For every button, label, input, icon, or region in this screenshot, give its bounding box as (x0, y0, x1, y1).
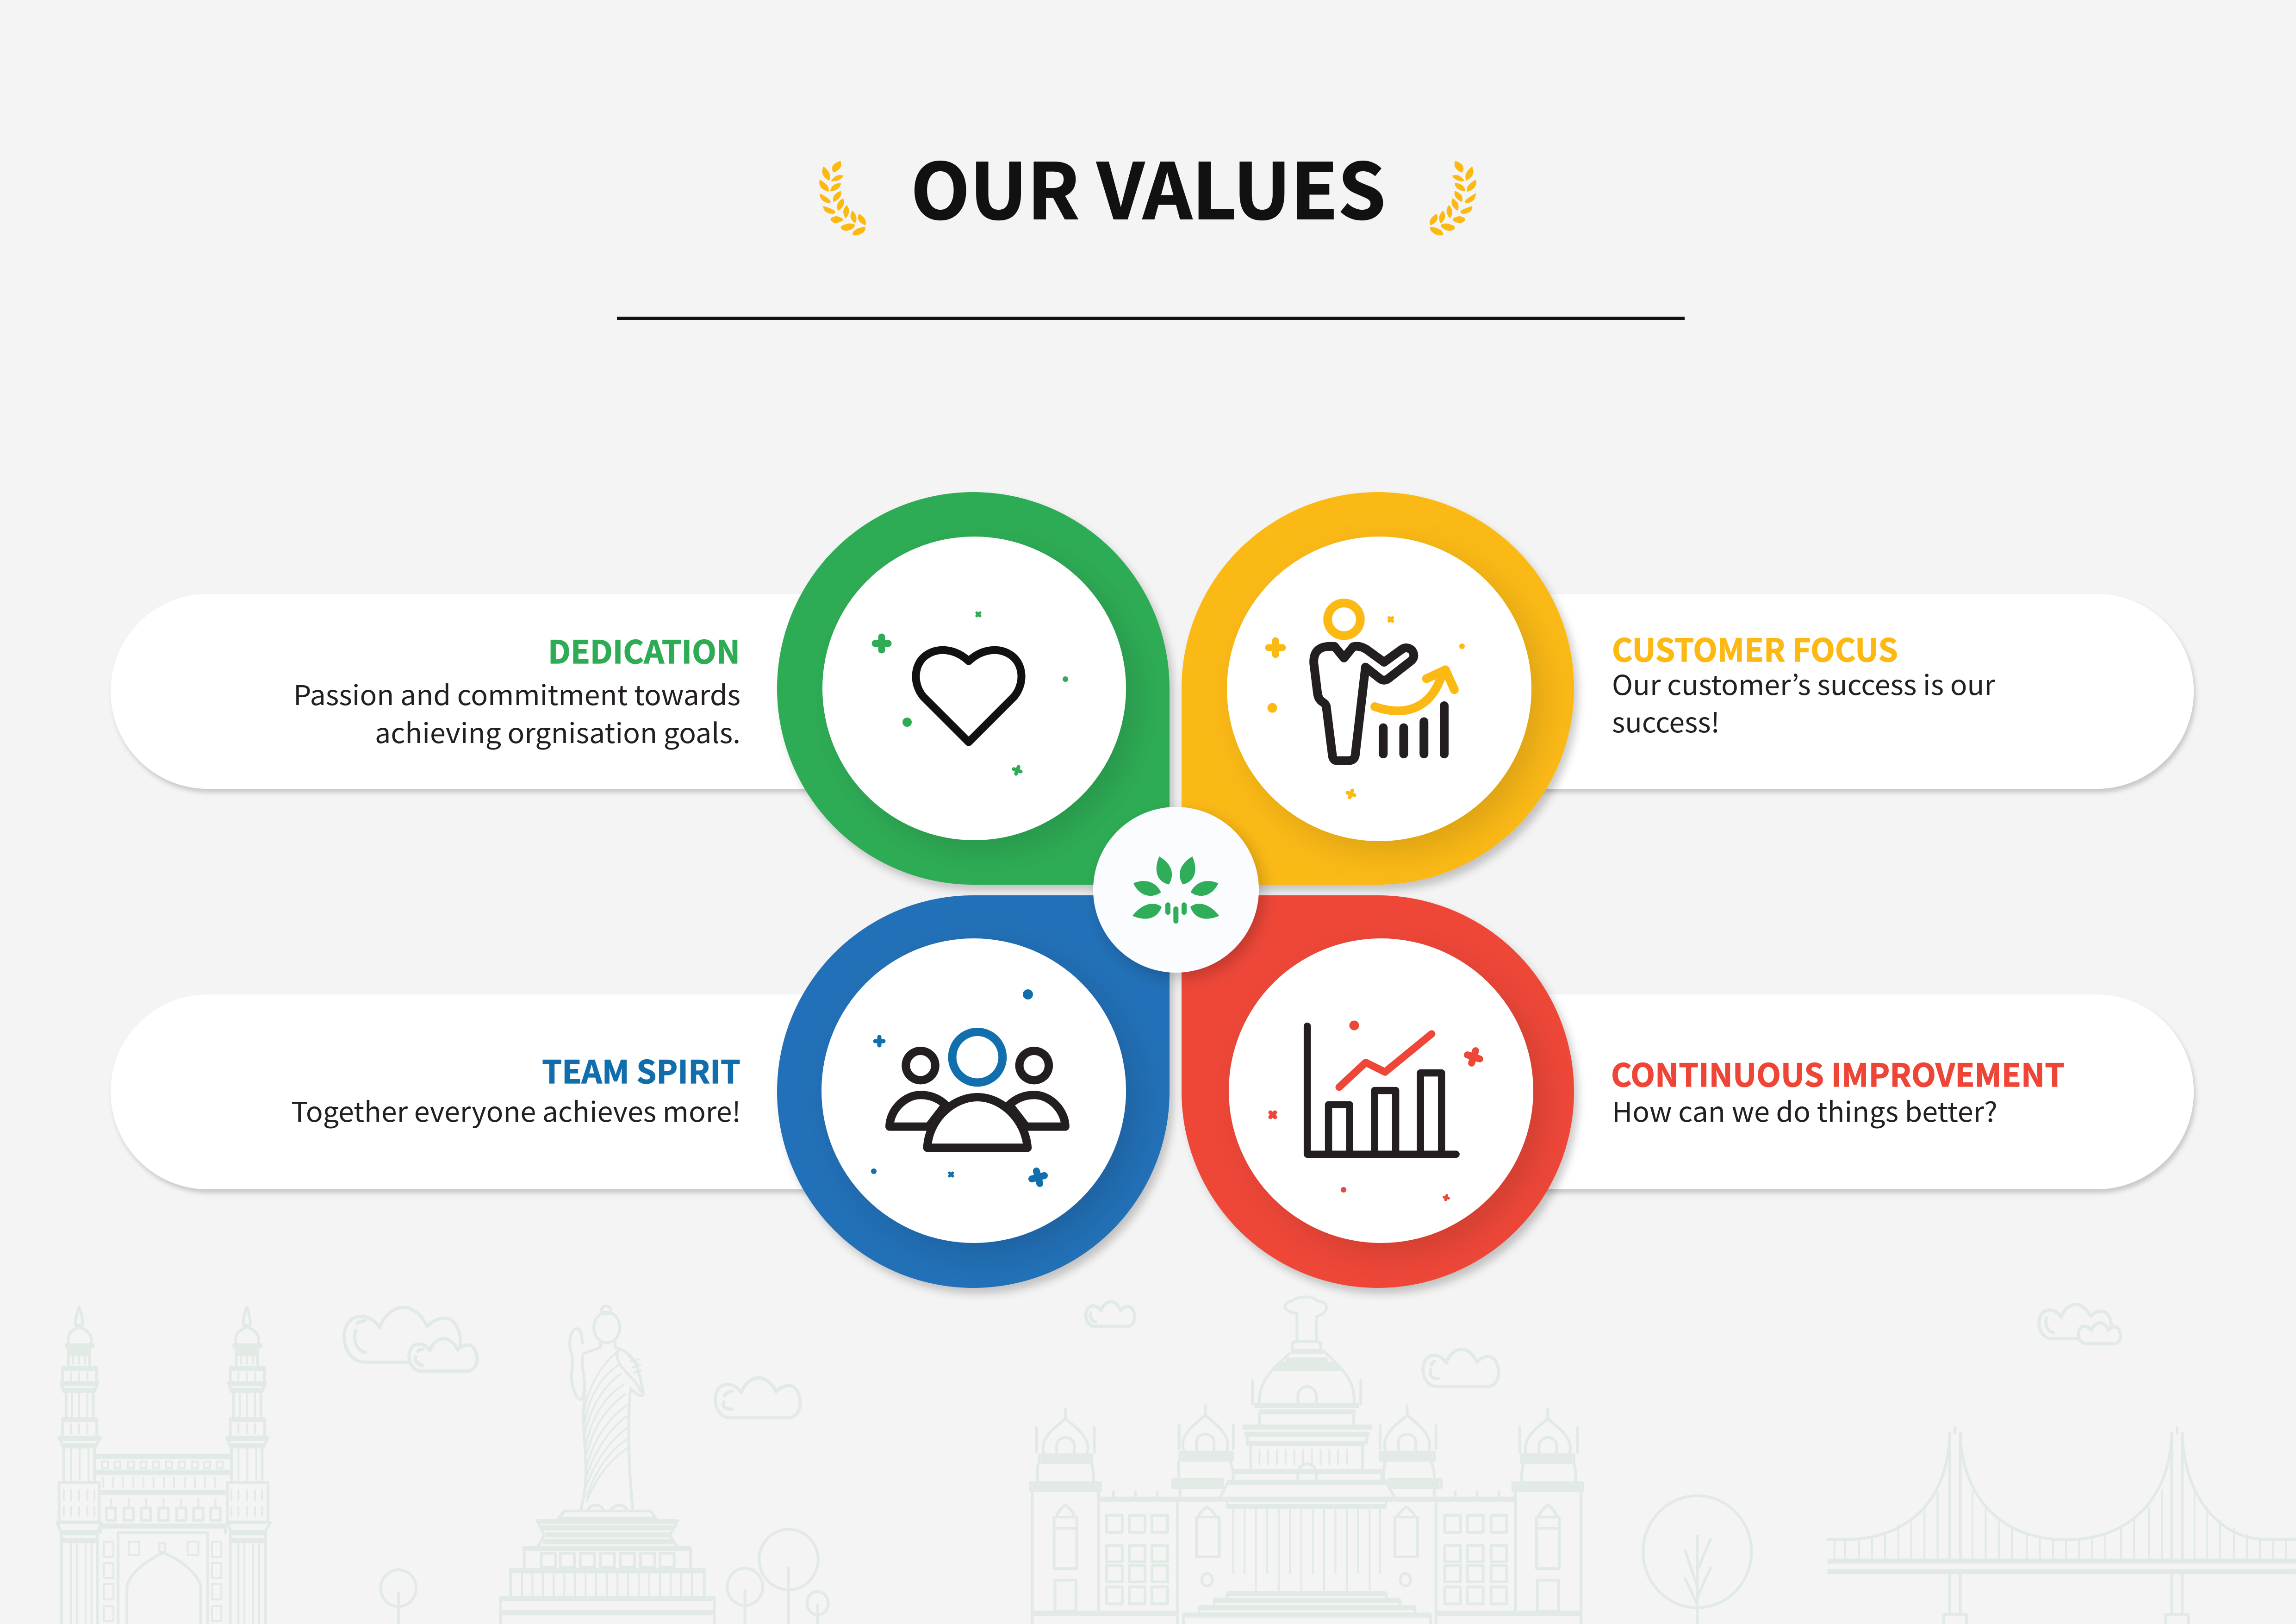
icon: right laurel (1430, 161, 1476, 235)
icon: left laurel (820, 161, 865, 235)
monument: central gallery and arch (96, 1456, 230, 1624)
text: customer focus description (1612, 663, 1995, 740)
bridge (1828, 1428, 2296, 1624)
heading: our values: OUR VALUES (911, 130, 1386, 241)
heading: continuous improvement: CONTINUOUS IMPROVEMENT (1611, 1050, 2065, 1096)
cloud: single (715, 1378, 800, 1418)
text: team spirit description: Together everyone achieves more! (291, 1090, 741, 1130)
petal: blue team spirit ring (777, 895, 1170, 1288)
panel: customer focus (1407, 594, 2194, 789)
cloud: right of dome (1423, 1349, 1499, 1387)
text: dedication description: achieving orgnisation goals. (375, 712, 740, 751)
tree (1643, 1496, 1751, 1624)
panel: continuous improvement (1407, 994, 2194, 1189)
palace: domed turrets (1031, 1405, 1583, 1491)
text: customer focus description: Our customer’s success is our (1612, 663, 1995, 703)
monument: left minaret (57, 1307, 101, 1624)
monument: right minaret (227, 1307, 270, 1624)
palace: main block with windows and steps (1032, 1488, 1581, 1624)
text: continuous improvement description: How can we do things better? (1612, 1090, 1997, 1130)
cloud: pair upper right (2039, 1305, 2121, 1344)
background skyline left: monument, statue, clouds and trees (57, 1306, 828, 1624)
panel: team spirit (111, 994, 897, 1189)
icon: presenter with rising chart (1267, 603, 1465, 799)
icon: bar chart with trend line (1268, 1020, 1482, 1200)
text: dedication description (293, 674, 740, 751)
palace: central dome tower (1099, 1297, 1516, 1499)
cloud: small centre (1086, 1302, 1134, 1326)
petal: red continuous improvement ring (1182, 895, 1574, 1288)
centre hub with leaf logo (1093, 807, 1259, 973)
title with laurels (820, 130, 1476, 241)
heading: dedication: DEDICATION (548, 627, 740, 673)
petal: yellow customer focus ring (1182, 492, 1574, 885)
cloud: pair near monument (344, 1307, 477, 1371)
background skyline right: palace, tree, bridge and clouds (1031, 1297, 2296, 1624)
statue (499, 1306, 716, 1624)
heading: team spirit: TEAM SPIRIT (542, 1047, 740, 1093)
panel: dedication (111, 594, 897, 789)
icon: team of three people (871, 989, 1065, 1185)
text: dedication description: Passion and commitment towards (293, 674, 740, 713)
heading: customer focus: CUSTOMER FOCUS (1612, 625, 1898, 671)
icon: heart (875, 611, 1068, 775)
petal: green dedication ring (777, 492, 1170, 885)
icon: leaf logo (1132, 856, 1219, 924)
trees (381, 1529, 828, 1624)
text: customer focus description: success! (1612, 701, 1720, 740)
